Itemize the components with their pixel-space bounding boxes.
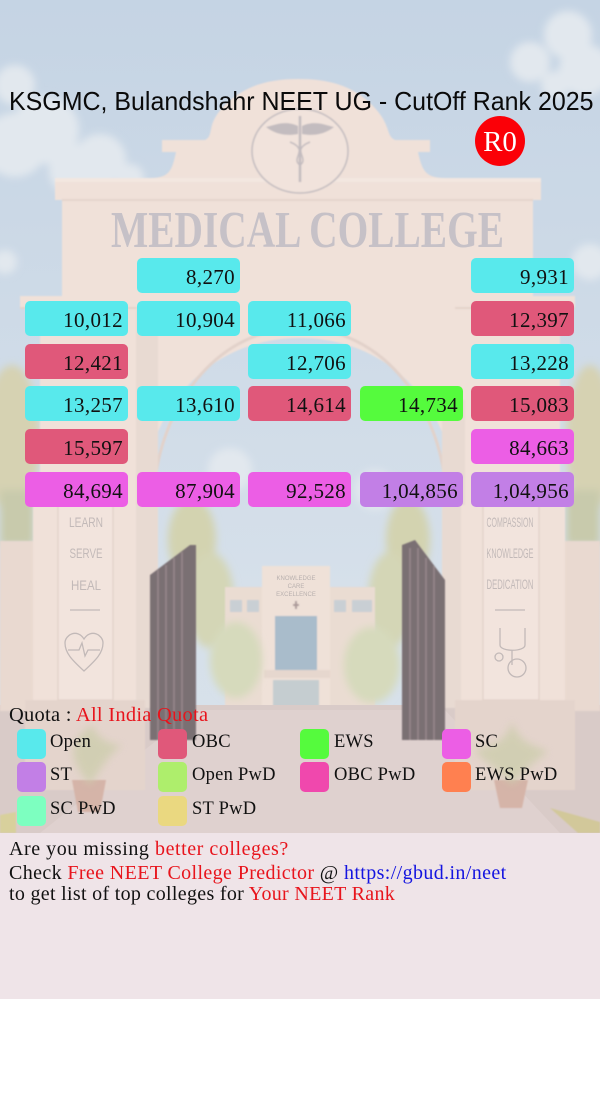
row 4 cells: 13,257 <box>63 393 123 417</box>
road and ground <box>0 705 600 835</box>
row 4 cells: 14,614 <box>286 393 346 417</box>
row 1 cells: 9,931 <box>520 265 569 289</box>
pillar mottos: SERVE <box>70 545 102 561</box>
pillar mottos <box>69 514 534 593</box>
legend: ST PwD <box>192 799 256 819</box>
row 4 cells: 13,610 <box>175 393 235 417</box>
row 1 cells <box>137 258 574 293</box>
small trees in front of building <box>210 622 400 703</box>
building inscription <box>276 576 316 598</box>
legend: Open <box>50 732 91 752</box>
row 3 cells: 13,228 <box>509 351 569 375</box>
iron gates <box>150 540 445 740</box>
footer call to action: to get list of top colleges for Your NEET Rank <box>9 883 395 905</box>
footer backdrop <box>0 833 600 999</box>
planters <box>72 780 528 812</box>
quota heading: Quota : All India Quota <box>9 704 208 726</box>
round badge <box>475 116 525 166</box>
building inscription: KNOWLEDGE <box>276 576 316 582</box>
row 6 cells: 92,528 <box>286 479 346 503</box>
row 2 cells: 10,904 <box>175 308 235 332</box>
legend: ST <box>50 765 72 785</box>
building inscription: EXCELLENCE <box>276 592 316 598</box>
row 6 cells <box>25 472 574 507</box>
pillar mottos: KNOWLEDGE <box>486 545 534 561</box>
row 2 cells <box>25 301 574 336</box>
row 1 cells: 8,270 <box>186 265 235 289</box>
row 5 cells: 84,663 <box>509 436 569 460</box>
trees left and right <box>0 365 600 648</box>
icons: heart and stethoscope <box>65 610 526 677</box>
building inscription: CARE <box>288 584 304 590</box>
row 4 cells <box>25 386 574 421</box>
clouds <box>0 11 600 510</box>
legend: OBC PwD <box>334 765 415 785</box>
row 6 cells: 87,904 <box>175 479 235 503</box>
pillar mottos: LEARN <box>69 514 103 530</box>
row 5 cells: 15,597 <box>63 436 123 460</box>
central building <box>225 566 375 708</box>
row 6 cells: 1,04,856 <box>382 479 458 503</box>
pillar mottos: HEAL <box>71 577 101 593</box>
pillar mottos: COMPASSION <box>486 514 534 530</box>
legend: SC PwD <box>50 799 116 819</box>
legend: SC <box>475 732 498 752</box>
pillar mottos: DEDICATION <box>486 576 534 592</box>
upper gate arch <box>20 79 575 708</box>
lower pillars <box>0 505 600 790</box>
legend: OBC <box>192 732 231 752</box>
legend: EWS <box>334 732 374 752</box>
round badge: R0 <box>483 126 517 158</box>
footer call to action <box>9 838 507 905</box>
row 2 cells: 10,012 <box>63 308 123 332</box>
caduceus emblem <box>252 109 348 193</box>
legend: Open PwD <box>192 765 276 785</box>
footer call to action: Check Free NEET College Predictor @ https://gbud.in/neet <box>9 862 507 884</box>
legend: EWS PwD <box>475 765 557 785</box>
row 3 cells <box>25 344 574 379</box>
cutoff rank grid <box>25 258 574 507</box>
row 5 cells <box>25 429 574 464</box>
row 6 cells: 1,04,956 <box>493 479 569 503</box>
footer call to action: Are you missing better colleges? <box>9 838 289 860</box>
kerb stripes <box>0 808 600 833</box>
row 3 cells: 12,421 <box>63 351 123 375</box>
row 4 cells: 14,734 <box>398 393 458 417</box>
row 6 cells: 84,694 <box>63 479 123 503</box>
row 3 cells: 12,706 <box>286 351 346 375</box>
title: KSGMC, Bulandshahr NEET UG - CutOff Rank 2025 <box>9 86 594 116</box>
row 4 cells: 15,083 <box>509 393 569 417</box>
legend <box>17 729 557 826</box>
row 2 cells: 11,066 <box>287 308 346 332</box>
row 2 cells: 12,397 <box>509 308 569 332</box>
